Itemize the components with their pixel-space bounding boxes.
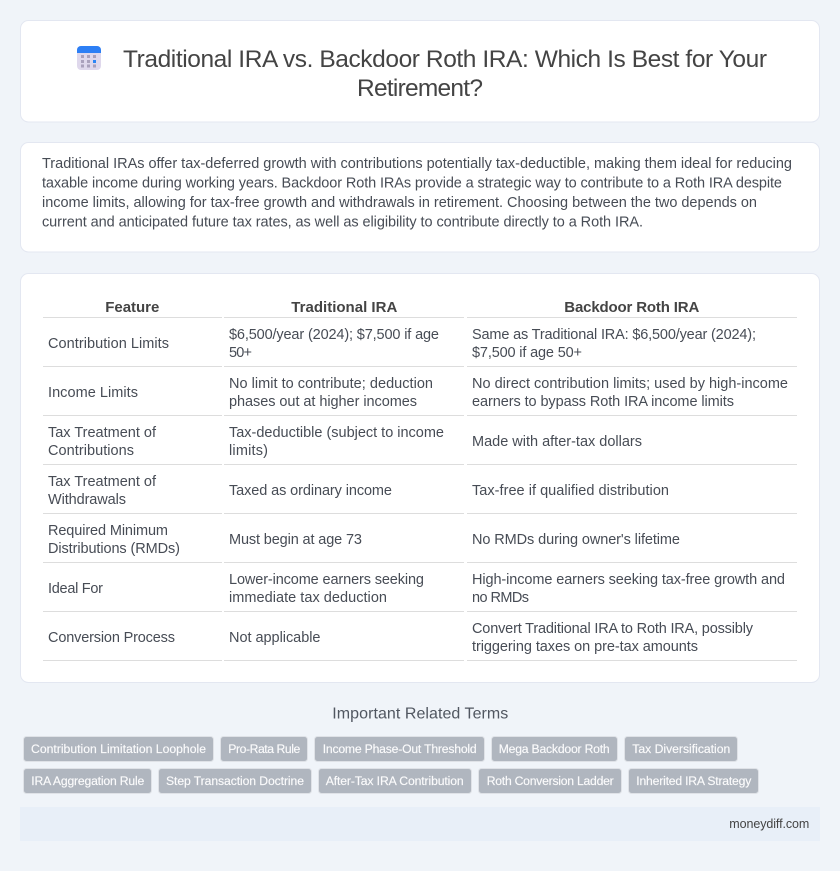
tag: pro-rata rule — [220, 736, 308, 762]
tag: tax diversification — [624, 736, 738, 762]
row: tax treatment of contributions: Made with after-tax dollars — [472, 434, 642, 450]
tag: ira aggregation rule: IRA Aggregation Rule — [31, 774, 145, 788]
tag: tax diversification: Tax Diversification — [632, 742, 730, 756]
title — [123, 46, 767, 102]
tag: pro-rata rule: Pro-Rata Rule — [228, 742, 301, 756]
tag: inherited ira strategy: Inherited IRA Strategy — [636, 774, 752, 788]
tag: income phase-out threshold — [314, 736, 484, 762]
title: Traditional IRA vs. Backdoor Roth IRA: Which Is Best for Your — [123, 46, 767, 73]
heading: related terms: Important Related Terms — [332, 706, 508, 722]
table header: Traditional IRA — [291, 299, 397, 316]
row: ideal for — [43, 572, 797, 612]
row: tax treatment of contributions: Tax-deductible (subject to income — [229, 425, 444, 441]
row: tax treatment of withdrawals: Tax Treatment of — [48, 474, 157, 490]
row: conversion process: Conversion Process — [48, 630, 175, 646]
row: required minimum distributions: No RMDs during owner's lifetime — [472, 532, 680, 548]
panel: title header — [20, 20, 820, 122]
tag: contribution limitation loophole — [24, 736, 214, 762]
row: income limits: phases out at higher incomes — [229, 394, 417, 410]
row: conversion process: triggering taxes on pre-tax amounts — [472, 639, 698, 655]
row: contribution limits — [43, 327, 797, 366]
row: tax treatment of withdrawals: Withdrawals — [48, 492, 126, 508]
title: Retirement? — [357, 75, 483, 102]
tag: ira aggregation rule — [24, 768, 152, 794]
tag: roth conversion ladder — [478, 768, 622, 794]
row: tax treatment of contributions: Contributions — [48, 443, 134, 459]
tag: income phase-out threshold: Income Phase-Out Threshold — [323, 742, 477, 756]
footer source: moneydiff.com — [729, 817, 809, 831]
row: required minimum distributions: Distributions (RMDs) — [48, 541, 180, 557]
row: tax treatment of contributions — [43, 425, 797, 464]
intro text: Traditional IRAs offer tax-deferred growth with contributions potentially tax-deductible, making them ideal for reducing — [42, 156, 792, 172]
related terms tags — [24, 736, 758, 794]
tag: inherited ira strategy — [628, 768, 758, 794]
row: income limits: No limit to contribute; deduction — [229, 376, 433, 392]
tag: contribution limitation loophole: Contribution Limitation Loophole — [31, 742, 206, 756]
row: required minimum distributions — [43, 523, 797, 562]
tag: after-tax ira contribution: After-Tax IRA Contribution — [326, 774, 464, 788]
table header: Backdoor Roth IRA — [564, 299, 699, 316]
intro text — [42, 156, 792, 231]
intro text: taxable income during working years. Backdoor Roth IRAs provide a strategic way to contribute to a Roth IRA despite — [42, 176, 782, 192]
row: ideal for: no RMDs — [472, 590, 529, 606]
row: income limits: earners to bypass Roth IRA income limits — [472, 394, 734, 410]
tag: mega backdoor roth: Mega Backdoor Roth — [499, 742, 610, 756]
row: required minimum distributions: Required Minimum — [48, 523, 168, 539]
icon: calendar — [77, 46, 101, 70]
footer — [20, 807, 820, 841]
row: tax treatment of withdrawals — [43, 474, 797, 514]
row: ideal for: immediate tax deduction — [229, 590, 387, 606]
row: contribution limits: $6,500/year (2024); $7,500 if age — [229, 327, 439, 343]
panel: introduction — [20, 142, 820, 252]
tag: step transaction doctrine: Step Transaction Doctrine — [166, 774, 304, 788]
row: tax treatment of withdrawals: Taxed as ordinary income — [229, 483, 392, 499]
row: tax treatment of contributions: limits) — [229, 443, 268, 459]
row: required minimum distributions: Must begin at age 73 — [229, 532, 362, 548]
row: income limits — [43, 376, 797, 416]
row: ideal for: Ideal For — [48, 581, 103, 597]
row: ideal for: Lower-income earners seeking — [229, 572, 424, 588]
row: contribution limits: $7,500 if age 50+ — [472, 345, 582, 361]
row: income limits: Income Limits — [48, 385, 138, 401]
tag: roth conversion ladder: Roth Conversion Ladder — [487, 774, 614, 788]
tag: mega backdoor roth — [492, 736, 618, 762]
row: conversion process — [43, 621, 797, 660]
row: conversion process: Not applicable — [229, 630, 320, 646]
row: contribution limits: 50+ — [229, 345, 252, 361]
row: tax treatment of contributions: Tax Treatment of — [48, 425, 157, 441]
intro text: income limits, allowing for tax-free growth and withdrawals in retirement. Choosing between the two depends on — [42, 195, 757, 211]
row: conversion process: Convert Traditional IRA to Roth IRA, possibly — [472, 621, 754, 637]
table header — [43, 299, 797, 318]
tag: after-tax ira contribution — [318, 768, 472, 794]
table header: Feature — [105, 299, 159, 316]
row: contribution limits: Contribution Limits — [48, 336, 169, 352]
row: tax treatment of withdrawals: Tax-free if qualified distribution — [472, 483, 669, 499]
tag: step transaction doctrine — [158, 768, 312, 794]
panel: comparison table — [20, 274, 820, 682]
intro text: current and anticipated future tax rates, as well as eligibility to contribute directly to a Roth IRA. — [42, 215, 643, 231]
row: contribution limits: Same as Traditional IRA: $6,500/year (2024); — [472, 327, 756, 343]
row: ideal for: High-income earners seeking tax-free growth and — [472, 572, 785, 588]
row: income limits: No direct contribution limits; used by high-income — [472, 376, 788, 392]
